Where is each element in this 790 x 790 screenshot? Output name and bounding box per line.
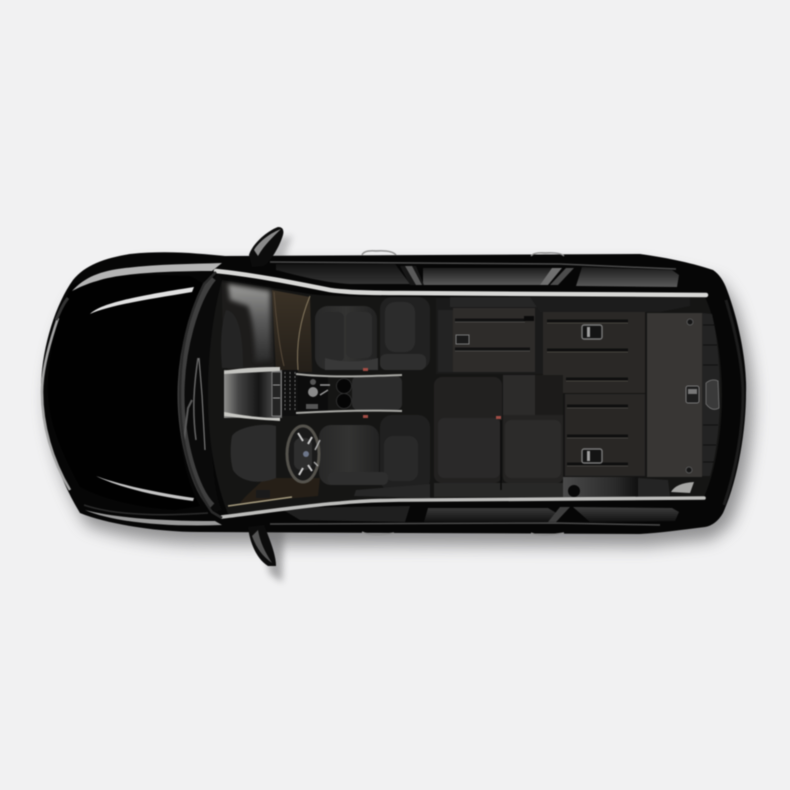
folded panel: third row lower: [565, 394, 645, 476]
interior dash front left pillar and screen area: [221, 282, 320, 506]
folded panel: second row upper: [453, 308, 535, 372]
roof rail: top: [216, 271, 706, 295]
folded panel: third row upper: [543, 312, 645, 393]
side glass: top row: [270, 262, 679, 287]
roof rail: bottom: [222, 498, 704, 517]
rear sill and trunk lip: [702, 300, 743, 505]
car body: [41, 252, 746, 534]
second row: upper seat base: [436, 297, 552, 374]
side glass: bottom row: [270, 506, 679, 525]
front passenger seat: [315, 297, 430, 370]
interior floor: [208, 280, 722, 514]
hood: [42, 263, 222, 525]
driver seat: [319, 415, 430, 498]
mirror: bottom: [248, 525, 276, 566]
windscreen base and wipers: [180, 274, 222, 512]
bottom side trim with grey panel: [563, 477, 694, 497]
steering wheel: [287, 426, 320, 482]
cup holders: [336, 378, 352, 408]
dashboard centre screen: [224, 367, 282, 421]
mirror: top: [249, 227, 283, 267]
centre console with silver trim: [296, 368, 402, 418]
second row: lower seat: [434, 375, 564, 497]
door handles: [362, 251, 564, 535]
driver side dash mound: [231, 425, 276, 498]
centre stack and controls: [282, 370, 330, 416]
top seat back row: [530, 297, 690, 312]
car shadow: [48, 236, 753, 582]
A-pillar tips: [180, 272, 222, 518]
cargo floor: [647, 313, 702, 477]
